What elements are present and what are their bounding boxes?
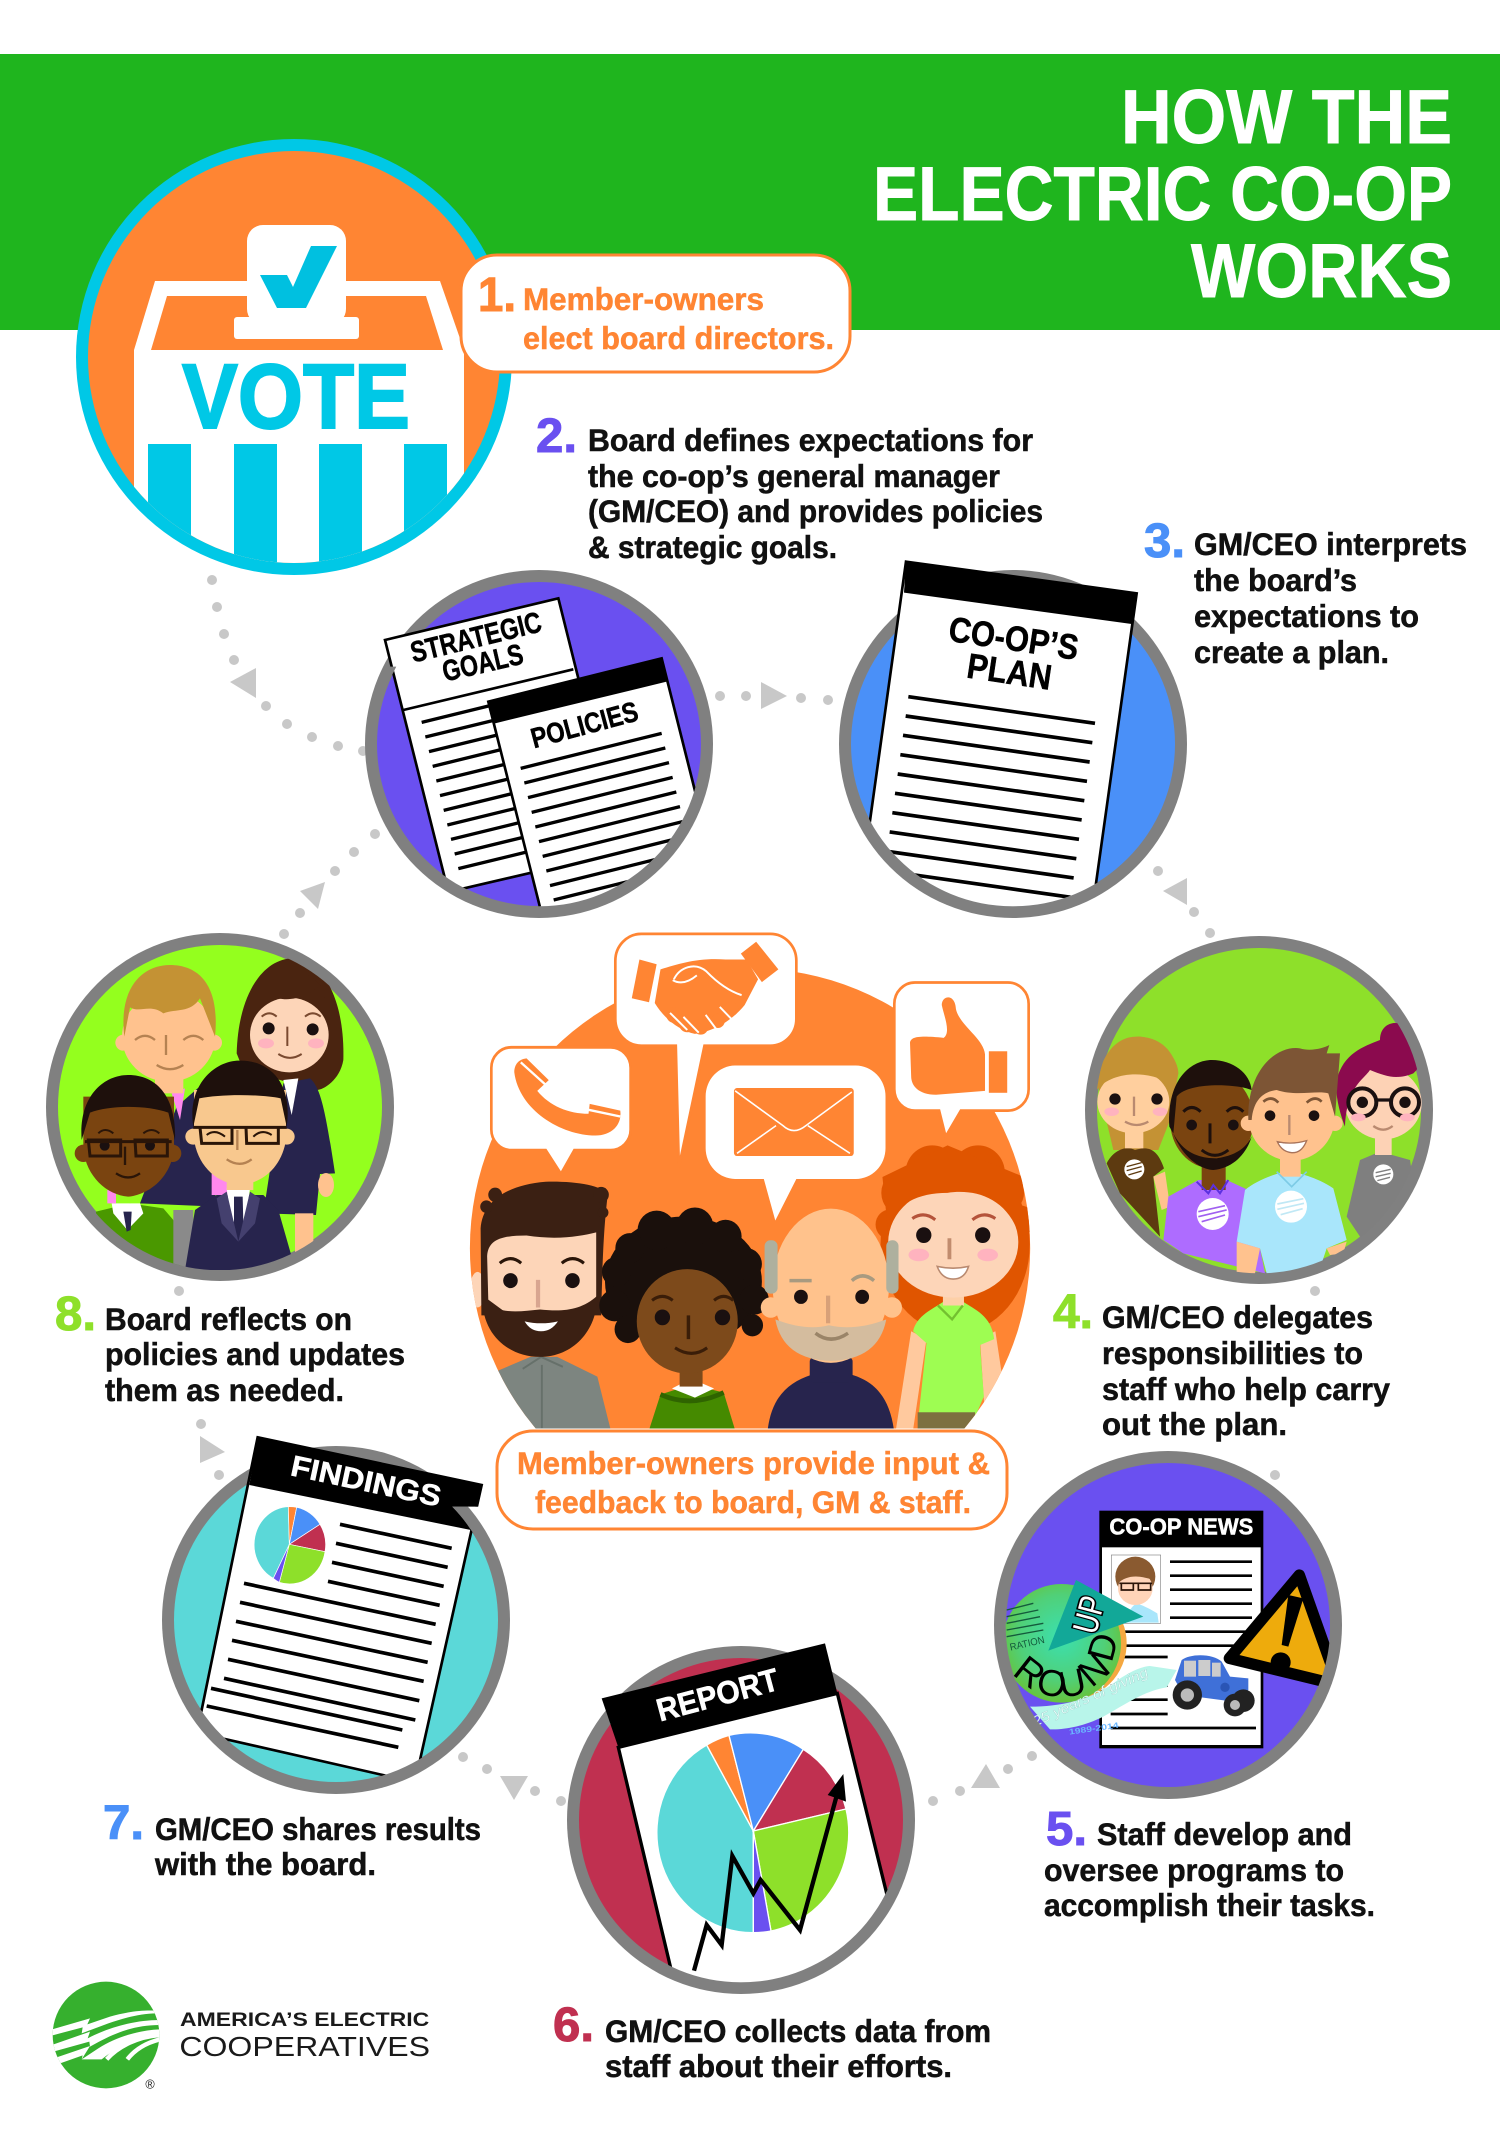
woman with glasses — [1336, 1023, 1422, 1237]
callout: step 1: elect board directors. — [523, 320, 834, 356]
newsletter page: CO-OP NEWS — [1109, 1513, 1253, 1539]
icon: handshake speech bubble — [615, 934, 796, 1167]
logo: America's Electric Cooperatives: COOPERATIVES — [179, 2031, 430, 2062]
panel: strategic goals and policies: POLICIES — [528, 696, 642, 755]
title: WORKS — [1191, 229, 1452, 314]
text: step 6: staff about their efforts. — [605, 2048, 952, 2084]
chart: rising trend arrow — [694, 1774, 846, 1971]
callout: member-owners feedback: feedback to board, GM & staff. — [535, 1484, 971, 1520]
woman director — [237, 958, 343, 1253]
woman with afro — [599, 1207, 769, 1430]
panel: strategic goals and policies: STRATEGIC — [407, 606, 545, 669]
text: step 2: 2. — [536, 410, 577, 463]
text: step 8: policies and updates — [105, 1336, 405, 1372]
text: step 3: create a plan. — [1194, 634, 1389, 670]
text: step 2: (GM/CEO) and provides policies — [588, 493, 1043, 529]
text: step 4: 4. — [1053, 1286, 1093, 1339]
logo: America's Electric Cooperatives: ® — [145, 2078, 155, 2092]
bald man — [761, 1209, 902, 1430]
text: step 7: GM/CEO shares results — [155, 1811, 481, 1847]
icon: roundup sticker: N — [1070, 1645, 1117, 1694]
callout: step 1: 1. — [478, 269, 516, 322]
panel: coop news — [994, 1451, 1342, 1799]
icon: roundup sticker: D — [1079, 1628, 1126, 1665]
text: step 8: 8. — [55, 1288, 96, 1341]
text: step 5: oversee programs to — [1044, 1852, 1344, 1888]
text: step 2 — [536, 410, 1043, 565]
callout: step 1: Member-owners — [523, 281, 764, 317]
icon: phone speech bubble — [491, 1047, 631, 1174]
text: step 3: 3. — [1144, 515, 1185, 568]
text: step 4: out the plan. — [1102, 1406, 1287, 1442]
woman with red hair — [876, 1145, 1035, 1430]
text: step 6: GM/CEO collects data from — [605, 2013, 991, 2049]
chart: report pie — [657, 1733, 849, 1933]
header banner — [0, 54, 1500, 330]
text: step 6: 6. — [553, 1999, 594, 2052]
connector dots and arrows — [174, 575, 1320, 1806]
icon: roundup sticker: UP — [1063, 1591, 1114, 1638]
callout: member-owners feedback: Member-owners provide input & — [517, 1445, 990, 1481]
logo: America's Electric Cooperatives — [50, 1982, 430, 2092]
man with light blue shirt — [1237, 1045, 1347, 1273]
icon: roundup sticker: RATION — [1009, 1635, 1046, 1654]
icon: roundup sticker: R — [1006, 1647, 1054, 1697]
text: step 2: Board defines expectations for — [588, 422, 1033, 458]
icon: roundup sticker: U — [1055, 1659, 1090, 1706]
man with suit and glasses — [173, 1061, 295, 1270]
icon: vote ballot box: VOTE — [182, 346, 410, 448]
man with beard — [470, 1182, 611, 1430]
text: step 5 — [1044, 1803, 1375, 1923]
text: step 2: & strategic goals. — [588, 529, 837, 565]
icon: tractor — [1173, 1655, 1255, 1716]
newsletter page — [1099, 1511, 1263, 1748]
chart: findings pie — [254, 1507, 326, 1584]
text: step 7: 7. — [103, 1797, 144, 1850]
text: step 5: 5. — [1046, 1803, 1087, 1856]
panel: findings — [162, 1437, 510, 1794]
panel: strategic goals and policies — [365, 570, 713, 918]
panel: report — [567, 1643, 915, 1994]
panel: strategic goals and policies: GOALS — [439, 638, 526, 688]
icon: envelope speech bubble — [706, 1066, 886, 1221]
title — [873, 75, 1452, 314]
text: step 2: the co-op’s general manager — [588, 458, 1000, 494]
text: step 7 — [103, 1797, 481, 1882]
text: step 8: them as needed. — [105, 1372, 344, 1408]
panel: co-op's plan: PLAN — [964, 647, 1054, 698]
ribbon: years of giving — [1029, 1664, 1177, 1737]
panel: co-op's plan: CO-OP’S — [946, 610, 1081, 668]
text: step 4 — [1053, 1286, 1390, 1442]
panel: member-owners center illustration — [470, 932, 1030, 1428]
icon: thumbs up speech bubble — [894, 982, 1029, 1137]
woman with brown shirt — [1097, 1037, 1178, 1237]
man with purple shirt — [1163, 1060, 1265, 1273]
icon: roundup sticker: O — [1033, 1659, 1070, 1707]
panel: co-op's plan — [839, 562, 1187, 950]
text: step 3: expectations to — [1194, 598, 1419, 634]
panel: findings: FINDINGS — [288, 1450, 444, 1514]
panel: report: REPORT — [652, 1661, 783, 1728]
icon: warning triangle — [1229, 1575, 1338, 1685]
text: step 3: the board’s — [1194, 562, 1357, 598]
panel: staff illustration — [1085, 936, 1433, 1284]
text: step 8 — [55, 1288, 405, 1408]
blond man director — [115, 965, 222, 1207]
text: step 5: accomplish their tasks. — [1044, 1887, 1375, 1923]
text: step 4: GM/CEO delegates — [1102, 1299, 1373, 1335]
callout: step 1 — [461, 255, 850, 372]
text: step 4: responsibilities to — [1102, 1335, 1363, 1371]
text: step 3 — [1144, 515, 1467, 670]
callout: member-owners feedback — [497, 1431, 1007, 1529]
icon: vote ballot box — [76, 139, 512, 600]
text: step 5: Staff develop and — [1097, 1816, 1352, 1852]
icon: roundup sticker — [1002, 1580, 1143, 1707]
ribbon: years of giving: 25 years of giving — [1029, 1664, 1151, 1730]
text: step 6 — [553, 1999, 991, 2084]
text: step 7: with the board. — [154, 1846, 376, 1882]
logo: America's Electric Cooperatives: AMERICA’S ELECTRIC — [180, 2009, 429, 2031]
text: step 3: GM/CEO interprets — [1194, 526, 1467, 562]
panel: board of directors illustration — [46, 933, 394, 1281]
text: step 8: Board reflects on — [105, 1301, 352, 1337]
text: step 4: staff who help carry — [1102, 1371, 1390, 1407]
ribbon: years of giving: 1989-2014 — [1068, 1721, 1120, 1737]
title: HOW THE — [1121, 75, 1452, 160]
man with green sweater — [75, 1075, 182, 1267]
